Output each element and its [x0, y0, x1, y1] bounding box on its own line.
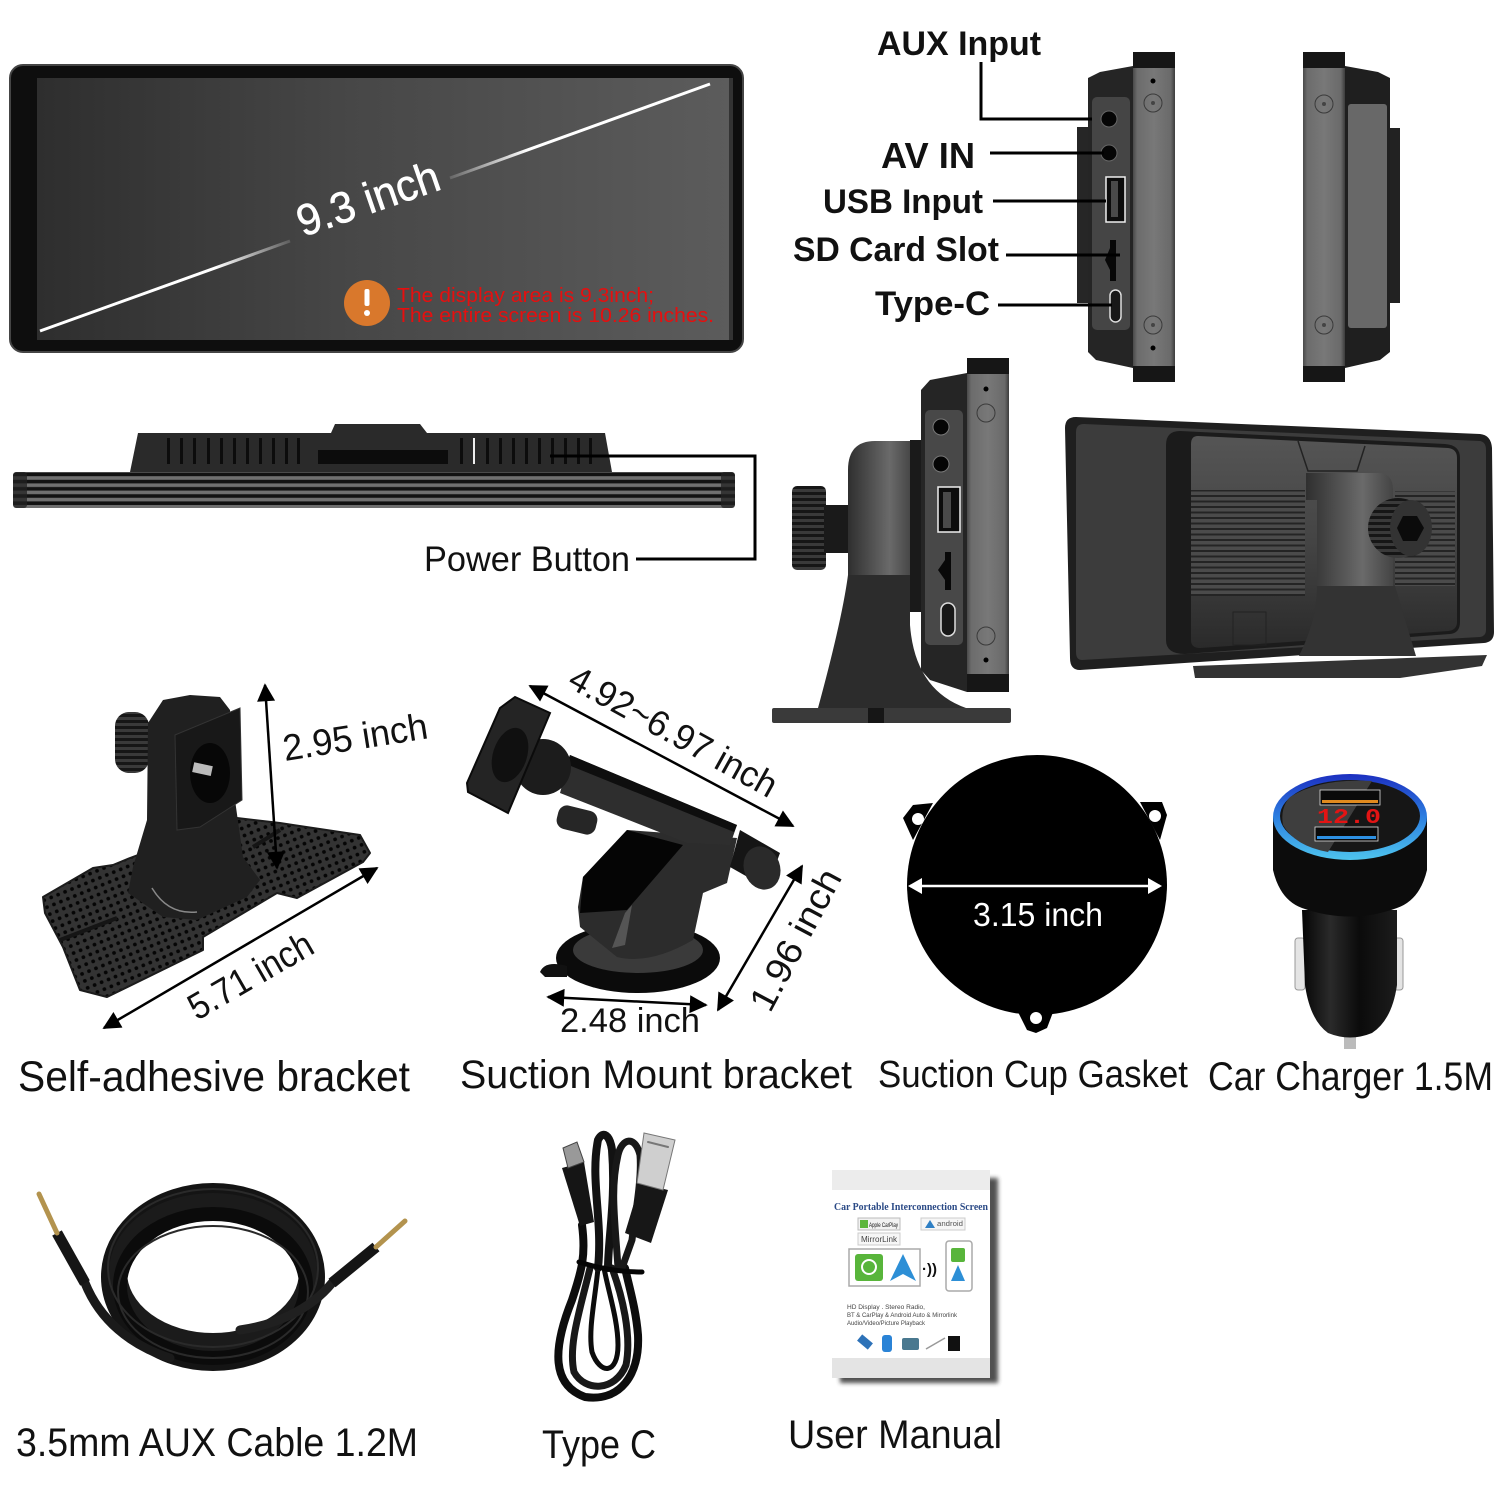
panel: AUX cable: [39, 1189, 405, 1360]
screen diagram: ·)): [922, 1261, 937, 1278]
USB port bottom: [1315, 827, 1378, 841]
port: SD slot: [1105, 240, 1116, 281]
badge: Android Auto: [921, 1218, 965, 1230]
dimension label: height: 2.95 inch: [280, 706, 430, 769]
label: Type-C: Type-C: [875, 285, 990, 323]
panel: right side ports view: [1077, 52, 1175, 382]
dimension label: width: 5.71 inch: [180, 923, 321, 1028]
manual text: HD Display . Stereo Radio,: [847, 1305, 925, 1311]
label: SD Card Slot: SD Card Slot: [793, 231, 999, 269]
display area note: [397, 285, 714, 327]
panel: self-adhesive bracket: [43, 685, 430, 1028]
dimension: height: [718, 866, 802, 1010]
screen diagram: [849, 1241, 972, 1291]
badge: MirrorLink: [858, 1233, 900, 1245]
dimension label: height: 1.96 inch: [741, 862, 850, 1018]
caption: 3.5mm AUX Cable 1.2M: 3.5mm AUX Cable 1.2M: [16, 1421, 418, 1465]
caption: Suction Cup Gasket: Suction Cup Gasket: [878, 1054, 1188, 1096]
USB port top: [1320, 790, 1380, 805]
caption: Type C: Type C: [542, 1423, 656, 1467]
caption: Self-adhesive bracket: Self-adhesive bracket: [18, 1053, 410, 1101]
manual text: Audio/Video/Picture Playback: [847, 1321, 926, 1327]
panel: front screen view: [10, 65, 743, 352]
USB-A plug: [625, 1133, 675, 1243]
badge: Apple CarPlay: [858, 1218, 900, 1230]
label: AUX Input: AUX Input: [877, 25, 1041, 63]
manual text: BT & CarPlay & Android Auto & Mirrorlink: [847, 1313, 958, 1319]
icon: warning: [344, 280, 390, 326]
manual text: [847, 1305, 958, 1327]
dimension: arm length: [530, 686, 793, 826]
dimension: diameter: [908, 878, 1162, 894]
dimension: base width: [548, 997, 706, 1005]
display area note: The display area is 9.3inch;: [397, 285, 654, 307]
caption: User Manual: User Manual: [788, 1413, 1002, 1457]
dimension: width: [104, 868, 377, 1028]
dimension label: diameter: 3.15 inch: [973, 896, 1103, 933]
panel: user manual: [832, 1170, 998, 1383]
display area note: The entire screen is 10.26 inches.: [397, 305, 714, 327]
panel: Type C cable: [558, 1133, 675, 1398]
label: USB Input: USB Input: [823, 183, 983, 221]
panel: top edge view: [13, 424, 735, 508]
port: USB: [1106, 177, 1125, 222]
manual icons: [857, 1334, 960, 1352]
label: Power Button: Power Button: [424, 540, 630, 579]
port: AV jack: [1101, 145, 1117, 161]
panel: left side view: [1303, 52, 1400, 382]
panel: suction mount bracket: [467, 657, 850, 1040]
micro plug: [562, 1142, 594, 1226]
label: AV IN: AV IN: [881, 135, 975, 176]
caption: Suction Mount bracket: Suction Mount bracket: [460, 1053, 852, 1097]
manual title: Car Portable Interconnection Screen: [834, 1201, 988, 1213]
callout lines: [550, 62, 1120, 559]
panel: mounted side view: [772, 358, 1011, 723]
cable tie: [579, 1262, 642, 1272]
screen size label: 9.3 inch: [290, 152, 446, 246]
panel: car charger: [1273, 774, 1427, 1049]
dimension label: arm length: 4.92~6.97 inch: [562, 657, 785, 805]
left plug: [57, 1233, 85, 1283]
port: Type-C: [1110, 290, 1121, 322]
right plug: [332, 1247, 376, 1283]
dimension label: base width: 2.48 inch: [560, 1002, 700, 1040]
badge: MirrorLink: MirrorLink: [861, 1235, 898, 1244]
dimension: height: [265, 685, 277, 868]
voltage display: 12.0: [1317, 807, 1381, 830]
badge: Android Auto: android: [937, 1221, 963, 1228]
panel: suction cup gasket: [903, 755, 1167, 1033]
badge: Apple CarPlay: Apple CarPlay: [869, 1223, 898, 1229]
panel: mounted rear view: [1065, 417, 1494, 678]
diagonal size line: [40, 84, 710, 331]
port: AUX jack: [1101, 111, 1117, 127]
